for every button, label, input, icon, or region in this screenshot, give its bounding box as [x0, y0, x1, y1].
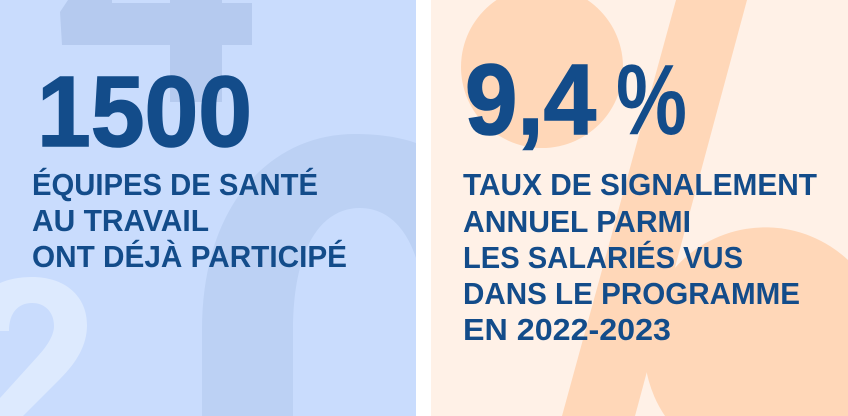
panel background: blue: [0, 0, 416, 416]
decorative numeral 2: [0, 277, 87, 416]
line 2: ANNUEL PARMI: [463, 204, 691, 239]
value: 9,4: [465, 44, 596, 156]
decorative percent: slash: [562, 0, 747, 416]
description: équipes de santé au travail: [32, 167, 347, 274]
line 3: LES SALARIÉS VUS: [463, 240, 743, 275]
decorative numeral 4: [60, 0, 252, 102]
line 1: TAUX DE SIGNALEMENT: [463, 167, 817, 202]
decorative percent: lower circle: [644, 227, 848, 416]
line 1: ÉQUIPES DE SANTÉ: [32, 167, 318, 202]
decorative numeral 0: [202, 134, 416, 416]
line 4: DANS LE PROGRAMME: [463, 276, 800, 311]
line 2: AU TRAVAIL: [32, 203, 209, 238]
panel: équipes de santé: [0, 0, 416, 416]
description: taux de signalement: [463, 167, 817, 347]
big number: 9,4 %: [465, 44, 687, 156]
line 3: ONT DÉJÀ PARTICIPÉ: [32, 239, 347, 274]
big number: 1500: 1500: [37, 56, 252, 168]
panel: taux de signalement: [431, 0, 848, 416]
percent sign: %: [616, 44, 687, 156]
line 5: EN 2022-2023: [463, 312, 671, 347]
panel background: cream: [431, 0, 848, 416]
decorative percent: upper circle: [461, 0, 623, 148]
